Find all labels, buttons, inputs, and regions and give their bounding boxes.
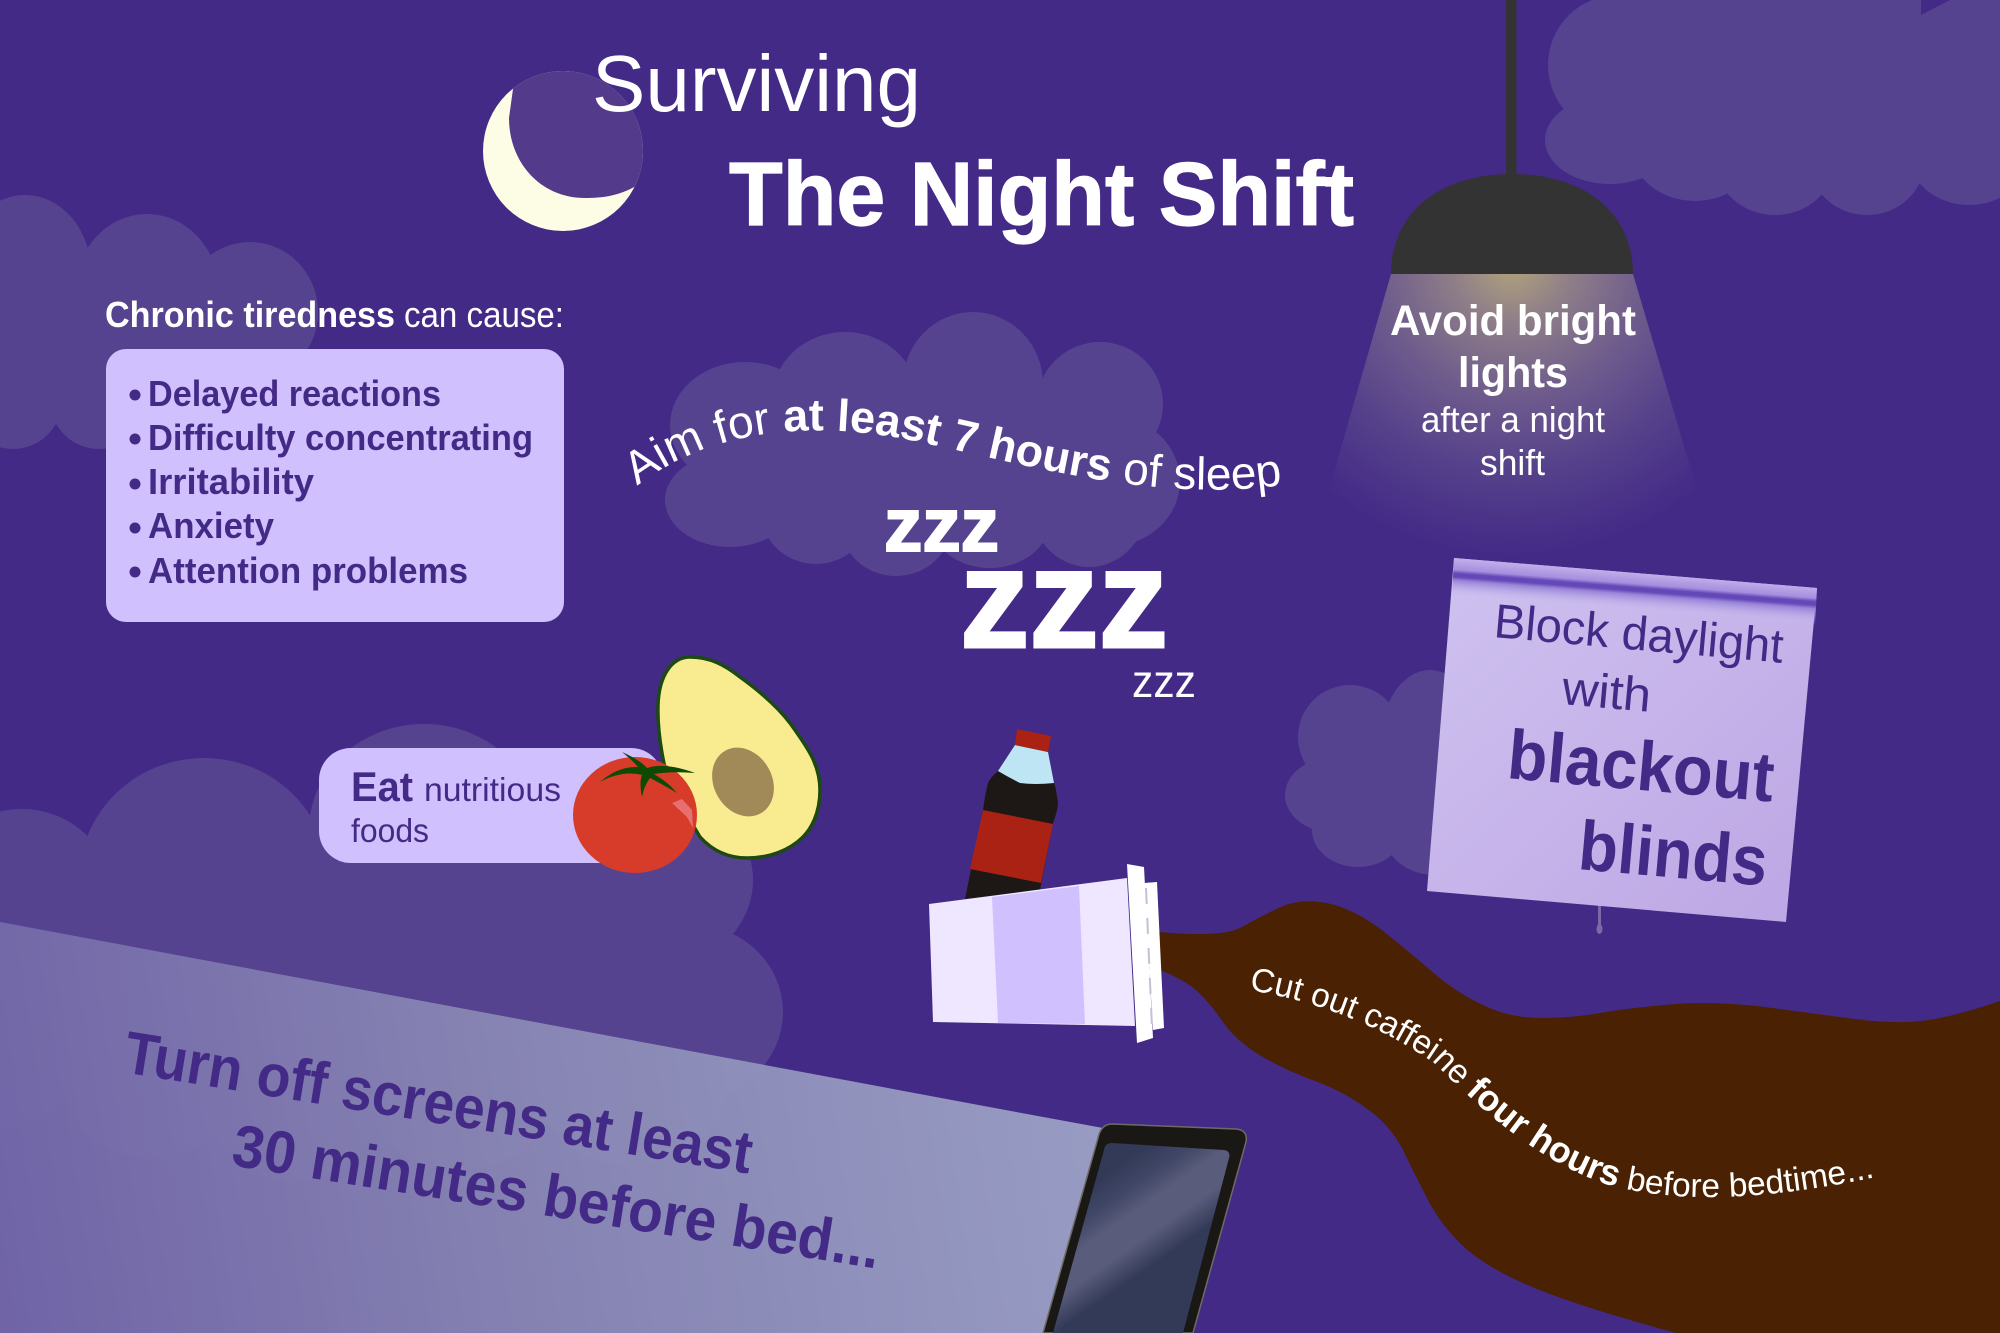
text: turn off screens: Turn off screens at least	[120, 1019, 757, 1186]
bottle liquid body	[965, 771, 1058, 899]
curved text: sleep goal: Aim for at least 7 hours of sleep	[630, 398, 1280, 498]
heading: chronic tiredness: can cause:	[404, 294, 564, 335]
cloud: lower left	[0, 724, 783, 1182]
text: avoid bright lights: Avoid bright	[1390, 297, 1636, 345]
sleeping z letters: zzz	[960, 519, 1168, 677]
text: turn off screens	[120, 1019, 885, 1281]
panel: eat nutritious foods: foods	[351, 812, 429, 849]
panel: symptoms list: Delayed reactions	[148, 373, 441, 414]
heading: chronic tiredness	[105, 294, 564, 335]
sleeping z letters: zzz	[884, 483, 999, 567]
lamp cord	[1506, 0, 1516, 180]
blind text: blackout	[1505, 715, 1778, 817]
cloud: upper left	[0, 195, 318, 449]
blind text: blinds	[1576, 806, 1771, 901]
panel: eat nutritious foods	[319, 748, 663, 863]
blind sheet	[1427, 558, 1817, 922]
lamp	[1312, 0, 1712, 555]
coffee spill	[1159, 901, 2000, 1333]
text: avoid bright lights: lights	[1458, 349, 1568, 397]
panel: symptoms list	[106, 349, 564, 622]
text: avoid bright lights: shift	[1480, 442, 1545, 483]
panel: symptoms list: Attention problems	[148, 550, 468, 591]
icon: crescent moon	[483, 71, 643, 231]
cup lid	[1127, 864, 1164, 1043]
title line: Surviving: Surviving	[592, 39, 921, 128]
panel: symptoms list: Irritability	[148, 461, 314, 502]
text: avoid bright lights	[1390, 297, 1636, 483]
cloud: right, behind blind	[1285, 670, 1485, 875]
lamp shade	[1391, 174, 1633, 274]
panel: blackout blind	[1427, 558, 1817, 934]
icon: tablet	[1043, 1124, 1246, 1333]
blind text: Block daylight	[1492, 595, 1786, 674]
icon: avocado	[658, 657, 820, 858]
cup body	[929, 878, 1135, 1026]
curved text: cut out caffeine: Cut out caffeine four hours before bedtime...	[1252, 969, 1872, 1198]
heading: chronic tiredness: Chronic tiredness	[105, 294, 395, 335]
sleeping z letters	[884, 483, 1196, 707]
bottle clear top	[998, 745, 1054, 784]
cloud: centre	[665, 312, 1180, 576]
blind text: with	[1559, 662, 1653, 723]
cup sleeve	[992, 886, 1085, 1024]
blind text	[1492, 595, 1786, 901]
icon: coffee cup	[929, 864, 1164, 1043]
screen glow	[0, 922, 1103, 1333]
panel: symptoms list: Difficulty concentrating	[148, 417, 533, 458]
title	[592, 39, 1354, 245]
bottle label	[970, 810, 1053, 883]
icon: tomato	[573, 752, 697, 873]
blind pull cord	[1596, 905, 1602, 934]
icon: soda bottle	[965, 729, 1058, 899]
text: avoid bright lights: after a night	[1421, 399, 1605, 440]
panel: symptoms list: Anxiety	[148, 505, 274, 546]
bottle cap	[1015, 729, 1051, 752]
title line: The Night Shift: The Night Shift	[729, 145, 1354, 245]
lamp light cone	[1312, 274, 1712, 555]
panel: eat nutritious foods: nutritious	[424, 771, 561, 808]
cloud: upper right	[1545, 0, 2000, 215]
text: turn off screens: 30 minutes before bed...	[228, 1112, 885, 1281]
sleeping z letters: zzz	[1132, 655, 1196, 707]
panel: eat nutritious foods: Eat	[351, 763, 413, 810]
blind rail	[1452, 558, 1817, 626]
